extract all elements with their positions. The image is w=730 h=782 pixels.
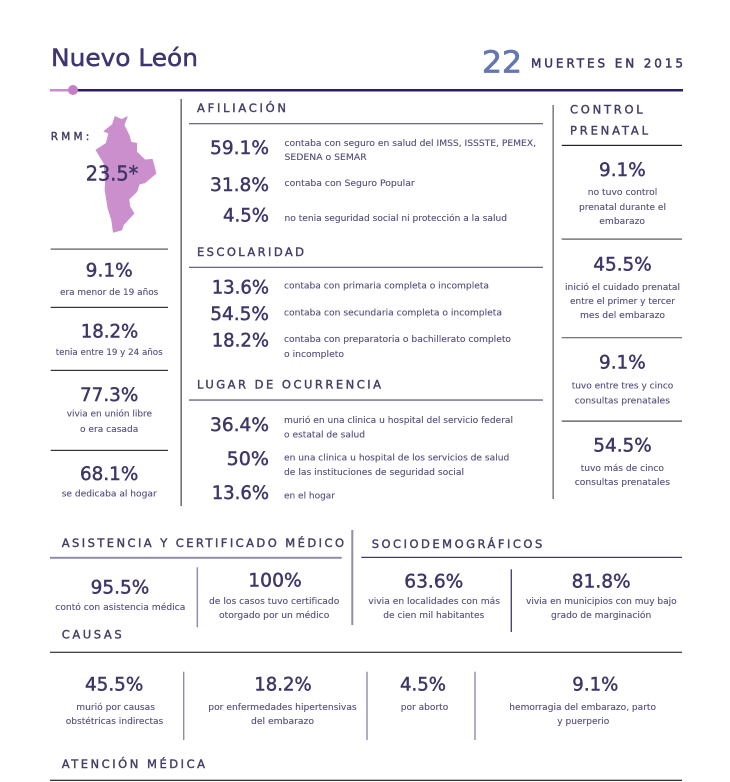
row: primaria: contaba con primaria completa o incompleta [284, 280, 489, 291]
row: seguridad social: en una clinica u hospital de los servicios de salud [284, 452, 509, 463]
stat: menor de 19: 9.1% [86, 261, 133, 282]
stat: menor de 19: era menor de 19 años [60, 287, 158, 298]
stat: inicio: 45.5% [593, 255, 652, 276]
stat: tres a cinco [572, 353, 674, 406]
stat: certificado: 100% [248, 571, 302, 592]
stat: inicio: inició el cuidado prenatal [565, 282, 680, 293]
header rule with marker [50, 85, 683, 95]
row: preparatoria: 18.2% [212, 331, 269, 352]
row: seguro: 59.1% [210, 138, 269, 159]
stat: sin control: no tuvo control [588, 187, 657, 198]
stat: tres a cinco: tuvo entre tres y cinco [572, 380, 674, 391]
stat: sin control [579, 160, 666, 227]
row: preparatoria: contaba con preparatoria o bachillerato completo [284, 334, 511, 345]
stat: hipertensivas: del embarazo [251, 716, 314, 727]
stat: localidades: de cien mil habitantes [383, 610, 484, 621]
stat: tres a cinco: consultas prenatales [575, 395, 670, 406]
row: hogar [212, 483, 335, 504]
stat: indirectas: obstétricas indirectas [66, 716, 164, 727]
heading: ATENCIÓN MÉDICA [62, 756, 205, 771]
row: secundaria: 54.5% [210, 304, 269, 325]
heading: CAUSAS [62, 628, 122, 642]
stat: localidades: vivia en localidades con más [368, 596, 500, 607]
stat: asistencia: 95.5% [91, 577, 149, 598]
stat: certificado: de los casos tuvo certificado [209, 596, 340, 607]
panel: sociodemográficos [361, 536, 682, 632]
stat: más de cinco: tuvo más de cinco [581, 463, 664, 474]
stat: indirectas [66, 675, 164, 727]
stat: 19 a 24 [56, 322, 163, 358]
stat: hogar [62, 464, 157, 500]
stat: inicio: mes del embarazo [580, 310, 665, 321]
stat: localidades: 63.6% [404, 571, 463, 592]
row: seguro popular [210, 175, 415, 196]
heading: CONTROL [570, 102, 643, 116]
stat: hemorragia: 9.1% [572, 675, 618, 696]
row: seguro [210, 138, 536, 163]
row: seguridad social: 50% [227, 449, 269, 470]
row: primaria: 13.6% [212, 277, 269, 298]
stat: unión libre [67, 385, 152, 435]
stat: sin control: 9.1% [599, 160, 646, 181]
row: hogar: 13.6% [212, 483, 269, 504]
stat: más de cinco: 54.5% [593, 436, 652, 457]
stat: sin control: embarazo [599, 216, 645, 227]
stat: aborto: 4.5% [400, 675, 446, 696]
stat: hipertensivas [208, 675, 357, 727]
row: servicio federal: murió en una clinica u hospital del servicio federal [284, 415, 513, 426]
stat: más de cinco: consultas prenatales [575, 477, 670, 488]
row: sin seguridad: no tenia seguridad social ni protección a la salud [284, 213, 507, 224]
stat: unión libre: o era casada [80, 424, 138, 435]
stat: unión libre: vivia en unión libre [67, 409, 152, 420]
stat: hogar: se dedicaba al hogar [62, 489, 157, 500]
stat: inicio [565, 255, 680, 321]
heading [570, 102, 649, 138]
row: primaria [212, 277, 489, 298]
stat: asistencia: contó con asistencia médica [55, 602, 185, 613]
heading: PRENATAL [570, 124, 649, 138]
row: seguro: SEDENA o SEMAR [284, 152, 367, 163]
row: secundaria [210, 304, 502, 325]
stat: hipertensivas: 18.2% [254, 675, 312, 696]
stat: inicio: entre el primer y tercer [570, 296, 675, 307]
heading: LUGAR DE OCURRENCIA [197, 378, 381, 392]
stat: marginación: 81.8% [572, 571, 631, 592]
stat: menor de 19 [60, 261, 158, 298]
icon: Nuevo León state map [96, 116, 156, 232]
row: servicio federal: o estatal de salud [284, 429, 365, 440]
row: seguro popular: contaba con Seguro Popular [284, 178, 415, 189]
deaths count: 22 [482, 46, 522, 80]
stat: unión libre: 77.3% [80, 385, 138, 406]
stat: hemorragia [509, 675, 656, 727]
row: preparatoria [212, 331, 511, 360]
row: secundaria: contaba con secundaria completa o incompleta [284, 307, 502, 318]
stat: 19 a 24: tenia entre 19 y 24 años [56, 347, 163, 358]
panel: asistencia y certificado médico [50, 535, 344, 627]
stat: certificado: otorgado por un médico [219, 610, 330, 621]
panel: afiliación [189, 100, 543, 227]
deaths count [482, 46, 683, 80]
stat: localidades [368, 571, 500, 621]
stat: hipertensivas: por enfermedades hipertensivas [208, 702, 357, 713]
stat: hemorragia: hemorragia del embarazo, parto [509, 702, 656, 713]
stat: indirectas: 45.5% [85, 675, 143, 696]
stat: aborto: por aborto [401, 702, 449, 713]
panel: causas [50, 628, 682, 740]
panel: RMM map [51, 116, 156, 232]
stat: asistencia [55, 577, 185, 613]
stat: más de cinco [575, 436, 670, 488]
stat: tres a cinco: 9.1% [599, 353, 646, 374]
stat: indirectas: murió por causas [76, 702, 155, 713]
stat: hemorragia: y puerperio [557, 716, 610, 727]
stat: aborto [400, 675, 449, 713]
heading: AFILIACIÓN [197, 100, 286, 115]
row: preparatoria: o incompleto [284, 349, 344, 360]
stat: marginación: grado de marginación [551, 610, 651, 621]
panel: control prenatal [562, 102, 682, 488]
RMM label: RMM: [51, 131, 89, 143]
panel: lugar de ocurrencia [189, 378, 543, 504]
title: Nuevo León [51, 44, 198, 72]
panel: edad y ocupación [51, 248, 168, 500]
column dividers [180, 99, 554, 625]
heading: ASISTENCIA Y CERTIFICADO MÉDICO [62, 535, 344, 550]
heading: ESCOLARIDAD [197, 245, 304, 259]
row: seguro popular: 31.8% [210, 175, 269, 196]
heading: SOCIODEMOGRÁFICOS [372, 536, 542, 551]
stat: certificado [209, 571, 340, 621]
stat: marginación: vivia en municipios con muy bajo [526, 596, 677, 607]
stat: hogar: 68.1% [80, 464, 138, 485]
row: sin seguridad [223, 206, 507, 227]
row: hogar: en el hogar [284, 490, 335, 501]
row: seguridad social [227, 449, 509, 478]
stat: sin control: prenatal durante el [579, 202, 666, 213]
panel: escolaridad [189, 245, 543, 360]
row: sin seguridad: 4.5% [223, 206, 269, 227]
row: servicio federal [210, 415, 513, 440]
deaths count: MUERTES EN 2015 [531, 56, 683, 70]
row: seguridad social: de las instituciones de seguridad social [284, 467, 464, 478]
RMM value: 23.5* [86, 162, 138, 186]
row: seguro: contaba con seguro en salud del IMSS, ISSSTE, PEMEX, [284, 138, 536, 149]
row: servicio federal: 36.4% [210, 415, 269, 436]
stat: marginación [526, 571, 677, 621]
stat: 19 a 24: 18.2% [81, 322, 138, 343]
